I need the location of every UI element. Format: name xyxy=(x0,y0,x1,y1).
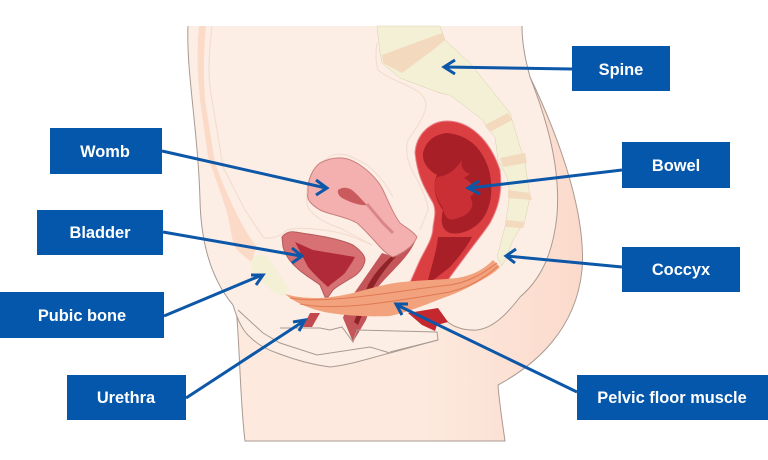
arrow: bowel xyxy=(468,170,622,194)
rectum lower xyxy=(408,308,448,331)
arrow: pubic bone xyxy=(164,275,263,316)
arrow: urethra xyxy=(186,320,305,398)
bowel xyxy=(408,121,501,293)
label: Pubic bone: Pubic bone xyxy=(38,307,126,325)
womb xyxy=(308,158,417,257)
pubic bone xyxy=(250,255,288,297)
label: Bowel: Bowel xyxy=(652,157,700,175)
peritoneum line xyxy=(209,26,428,245)
label: Spine: Spine xyxy=(599,61,643,79)
arrow: pelvic floor muscle xyxy=(396,304,577,392)
label: Pelvic floor muscle: Pelvic floor muscle xyxy=(597,389,747,407)
label: Coccyx xyxy=(622,247,740,292)
vagina xyxy=(343,236,417,342)
label: Spine xyxy=(572,46,670,91)
external folds xyxy=(233,305,438,367)
label: Coccyx: Coccyx xyxy=(652,261,710,279)
label: Bowel xyxy=(622,142,730,188)
label: Bladder xyxy=(37,210,163,255)
arrows xyxy=(162,60,622,398)
illustration: pelvic side view xyxy=(188,26,582,441)
buttock and thigh xyxy=(236,77,582,441)
label: Pelvic floor muscle xyxy=(577,375,768,420)
inner belly band xyxy=(197,26,256,263)
arrow: bladder xyxy=(163,232,302,263)
spine xyxy=(377,26,532,266)
body outlines xyxy=(188,26,558,330)
arrow: womb xyxy=(162,151,327,195)
label: Urethra: Urethra xyxy=(97,389,156,407)
label: Womb xyxy=(50,128,162,174)
arrow: spine xyxy=(444,60,572,74)
arrow: coccyx xyxy=(506,249,622,267)
urethra xyxy=(303,313,320,327)
label: Urethra xyxy=(67,375,186,420)
label: Womb: Womb xyxy=(80,143,130,161)
pelvic floor muscle xyxy=(285,260,500,316)
label: Pubic bone xyxy=(0,292,164,338)
label: Bladder: Bladder xyxy=(69,224,131,242)
bladder xyxy=(282,232,365,297)
torso xyxy=(188,26,558,367)
